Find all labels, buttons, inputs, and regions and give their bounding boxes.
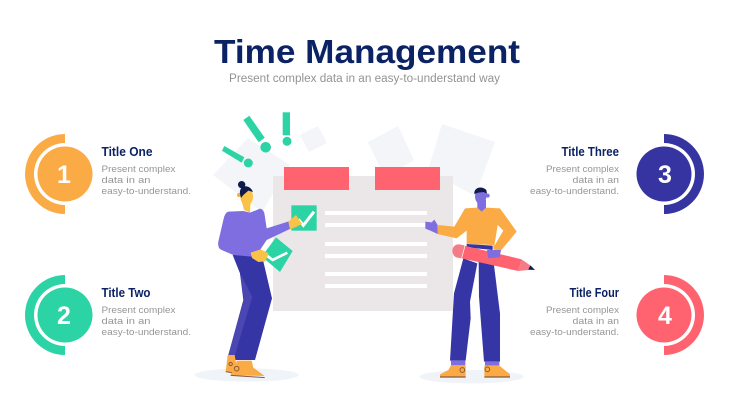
item 4: Title Four (530, 275, 704, 355)
subtitle: Present complex data in an easy-to-understand way (229, 73, 500, 85)
text 3: data in an (572, 175, 619, 186)
document lines (325, 211, 427, 288)
background tilted squares (213, 124, 495, 212)
text 3: Title Three (562, 145, 619, 159)
neck and head (241, 198, 251, 213)
legs (228, 250, 272, 360)
badge 3: 3 (658, 161, 672, 189)
woman with checklist cards (195, 181, 317, 382)
title: Time Management (214, 33, 520, 70)
hand on pencil (487, 250, 501, 258)
head (477, 200, 486, 212)
torso and arm (218, 209, 291, 257)
shoes (226, 355, 237, 373)
text 4: Title Four (570, 286, 619, 300)
text 2: Title Two (102, 286, 151, 300)
badge 1: 1 (57, 161, 71, 189)
hands (288, 215, 302, 229)
badge 2: 2 (57, 302, 71, 330)
text 4: data in an (572, 316, 619, 327)
check card 2 (262, 237, 293, 272)
badge 2 (25, 275, 92, 355)
item 3: Title Three (530, 134, 704, 214)
man holding pencil (420, 187, 535, 383)
text 2: data in an (102, 316, 150, 327)
belt (467, 244, 493, 250)
text 1: easy-to-understand. (102, 186, 191, 197)
text 1: Title One (102, 145, 153, 159)
text 3: Present complex (546, 164, 619, 175)
badge 4 (636, 275, 704, 355)
item 1: Title One (25, 134, 191, 214)
socks (451, 361, 465, 365)
torso (437, 208, 517, 252)
raised hand (425, 220, 438, 234)
legs (450, 258, 477, 361)
text 2: easy-to-understand. (102, 327, 191, 338)
text 1: data in an (102, 175, 150, 186)
text 4: easy-to-understand. (530, 327, 619, 338)
text 4: Present complex (546, 305, 619, 316)
text 2: Present complex (102, 305, 176, 316)
red tab left (284, 167, 349, 190)
exclamation marks (222, 112, 292, 168)
pencil (452, 244, 535, 271)
badge 1 (25, 134, 92, 214)
text 3 (530, 145, 619, 197)
badge 3 (636, 134, 704, 214)
check card 1 (291, 205, 317, 231)
text 4 (530, 286, 619, 338)
item 2: Title Two (25, 275, 191, 355)
badge 4: 4 (658, 302, 672, 330)
text 1: Present complex (102, 164, 176, 175)
shoes (440, 365, 466, 377)
document panel (273, 167, 453, 311)
text 1 (102, 145, 191, 197)
red tab right (375, 167, 440, 190)
text 2 (102, 286, 191, 338)
text 3: easy-to-understand. (530, 186, 619, 197)
